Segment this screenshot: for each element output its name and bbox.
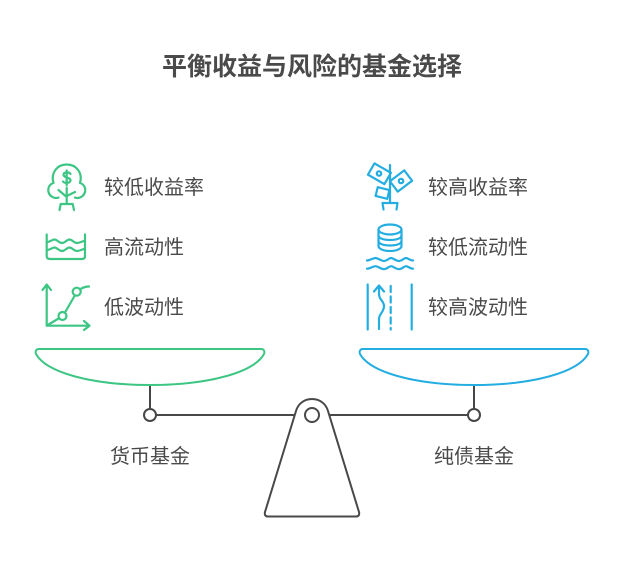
stand: [265, 399, 359, 516]
left joint: [144, 409, 156, 421]
label: higher-yield trait: 较低收益率: [104, 176, 204, 199]
label: liquidity trait: 较低流动性: [428, 236, 528, 259]
right pan: [360, 349, 588, 385]
left hanger: [149, 385, 151, 409]
icon: database over water: [367, 224, 413, 269]
label: yield trait: 较高收益率: [428, 176, 528, 199]
panel: money fund attributes: [42, 164, 204, 330]
right hanger: [473, 385, 475, 409]
scale: [36, 349, 588, 516]
icon: money plant: [368, 163, 412, 210]
icon: money tree: [48, 164, 85, 210]
icon: water level: [47, 234, 85, 259]
label: liquidity trait: 高流动性: [104, 236, 184, 259]
beam: [156, 414, 468, 416]
label: volatility trait: 低波动性: [104, 296, 184, 319]
left pan: [36, 349, 264, 385]
pivot: [305, 408, 319, 422]
label: volatility trait: 较高波动性: [428, 296, 528, 319]
panel: bond fund attributes: [367, 163, 528, 330]
title: 平衡收益与风险的基金选择: [162, 53, 462, 81]
right joint: [468, 409, 480, 421]
label: money market fund: 货币基金: [110, 445, 190, 468]
label: pure bond fund: 纯债基金: [434, 445, 514, 468]
icon: road with winding arrow: [368, 284, 412, 330]
icon: low volatility chart: [42, 284, 90, 330]
